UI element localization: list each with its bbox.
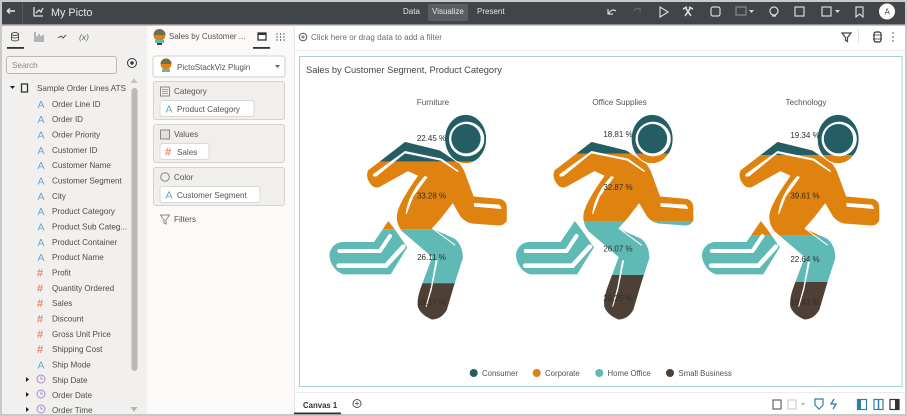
tree root: Sample Order Lines ATS	[37, 84, 127, 93]
chart: furniture	[329, 99, 507, 320]
category label: Technology	[786, 98, 827, 107]
icon: back arrow	[7, 8, 15, 14]
filters section: Filters	[174, 215, 196, 224]
data field list: Product Sub Categ...	[52, 222, 127, 232]
data field list: A	[38, 160, 45, 172]
plugin dropdown: PictoStackViz Plugin	[177, 63, 250, 72]
tab: Visualize: Visualize	[432, 7, 464, 16]
category section	[154, 82, 284, 120]
value labels: 18.81 %	[603, 130, 633, 139]
status bar icons	[773, 399, 899, 410]
color section	[154, 168, 284, 206]
toolbar icons	[608, 7, 863, 17]
value labels: 19.34 %	[790, 131, 820, 140]
data field list: Ship Mode	[52, 360, 91, 370]
data field list: #	[37, 344, 43, 356]
value labels: 22.25 %	[603, 294, 633, 303]
value labels: 26.07 %	[603, 244, 633, 254]
canvas tab	[294, 401, 341, 414]
tabs: data panel icons	[7, 32, 89, 49]
data field list: #	[37, 268, 43, 280]
data field list: Gross Unit Price	[52, 330, 111, 339]
data field list: Customer Name	[52, 161, 111, 170]
icon: project	[34, 7, 43, 16]
value labels	[417, 134, 446, 307]
data field list: #	[37, 283, 43, 295]
value labels: 32.87 %	[603, 183, 633, 192]
data field list	[26, 99, 127, 415]
tab icons	[253, 33, 284, 49]
data field list: A	[38, 99, 45, 111]
value labels: 33.28 %	[417, 192, 446, 200]
legend: Corporate	[545, 369, 580, 378]
data field list: Quantity Ordered	[52, 284, 114, 293]
data field list: Product Category	[52, 207, 116, 216]
values section: Values	[174, 130, 198, 139]
app title: My Picto	[51, 7, 92, 19]
tabs: data panel icons: (x)	[79, 32, 89, 42]
chart: office supplies	[516, 99, 694, 320]
color section: Color	[174, 173, 194, 182]
data field list: Order Priority	[52, 130, 101, 140]
value labels: 26.11 %	[417, 253, 446, 262]
data field list: Ship Date	[52, 376, 88, 385]
category section: Category	[174, 87, 208, 96]
data field list: Order ID	[52, 115, 83, 124]
color section: Customer Segment	[177, 191, 247, 200]
values section: Sales	[177, 148, 197, 157]
value labels	[790, 131, 820, 307]
icon: add data	[128, 58, 136, 68]
data field list: Order Line ID	[52, 100, 101, 109]
panel: visualization canvas	[300, 56, 902, 386]
data field list: Customer Segment	[52, 176, 122, 186]
runner pictogram	[329, 114, 507, 320]
data field list: Shipping Cost	[52, 345, 103, 354]
data field list: Order Time	[52, 406, 93, 415]
user avatar: A	[884, 8, 890, 16]
legend: Consumer	[482, 369, 518, 378]
chart title: Sales by Customer Segment, Product Category	[306, 65, 502, 75]
user avatar	[879, 4, 895, 20]
panel: data elements	[6, 32, 138, 415]
values section	[154, 124, 284, 162]
value labels: 18.41 %	[790, 298, 820, 307]
data field list: A	[38, 145, 45, 157]
data field list: Profit	[52, 268, 72, 278]
data field list: A	[38, 130, 45, 142]
data field list: Order Date	[52, 391, 93, 400]
panel: grammar	[153, 25, 295, 414]
runner pictogram	[702, 114, 880, 320]
search box	[6, 56, 116, 74]
data field list: Product Container	[52, 238, 118, 247]
data field list: City	[52, 192, 67, 201]
icon: add canvas	[353, 400, 361, 408]
value labels: 39.61 %	[790, 192, 820, 200]
category section: A	[166, 104, 173, 116]
top navigation bar	[2, 2, 905, 26]
data field list: Sales	[52, 299, 72, 308]
plugin dropdown	[153, 56, 285, 77]
data field list: Discount	[52, 314, 84, 324]
tab: Visualize	[428, 4, 468, 21]
data field list: A	[38, 176, 45, 188]
category label: Office Supplies	[592, 98, 647, 107]
legend	[470, 369, 732, 378]
category label: Furniture	[417, 98, 450, 107]
scrollbar	[130, 78, 138, 412]
bottom bar	[294, 392, 905, 414]
runner pictogram	[516, 114, 694, 320]
legend: Small Business	[678, 369, 732, 378]
data field list: A	[38, 206, 45, 218]
category section: Product Category	[177, 105, 241, 114]
canvas tab: Canvas 1	[303, 401, 338, 410]
panel title: Sales by Customer ...	[169, 32, 245, 41]
filter bar	[295, 29, 905, 51]
data field list: A	[38, 222, 45, 234]
data field list: #	[37, 314, 43, 326]
tab: Present: Present	[477, 7, 505, 16]
data field list: Product Name	[52, 253, 104, 262]
value labels: 18.17 %	[417, 298, 446, 307]
legend: Home Office	[608, 369, 651, 378]
tab: Data: Data	[403, 7, 420, 16]
data field list: Customer ID	[52, 146, 98, 155]
icon: plugin lightbulb	[154, 29, 166, 45]
color section: A	[166, 190, 173, 202]
data field list: A	[38, 114, 45, 126]
values section: #	[165, 146, 171, 158]
value labels: 22.45 %	[417, 134, 446, 143]
data field list: #	[37, 329, 43, 341]
filters section	[160, 215, 196, 224]
filter bar: Click here or drag data to add a filter	[311, 33, 442, 42]
value labels: 22.64 %	[790, 255, 820, 264]
data field list: #	[37, 298, 43, 310]
data field list: A	[38, 360, 45, 372]
value labels	[603, 130, 633, 303]
data field list: A	[38, 237, 45, 249]
search box: Search	[12, 61, 38, 70]
data field list: A	[38, 191, 45, 203]
chart: technology	[702, 99, 880, 320]
data field list: A	[38, 252, 45, 264]
